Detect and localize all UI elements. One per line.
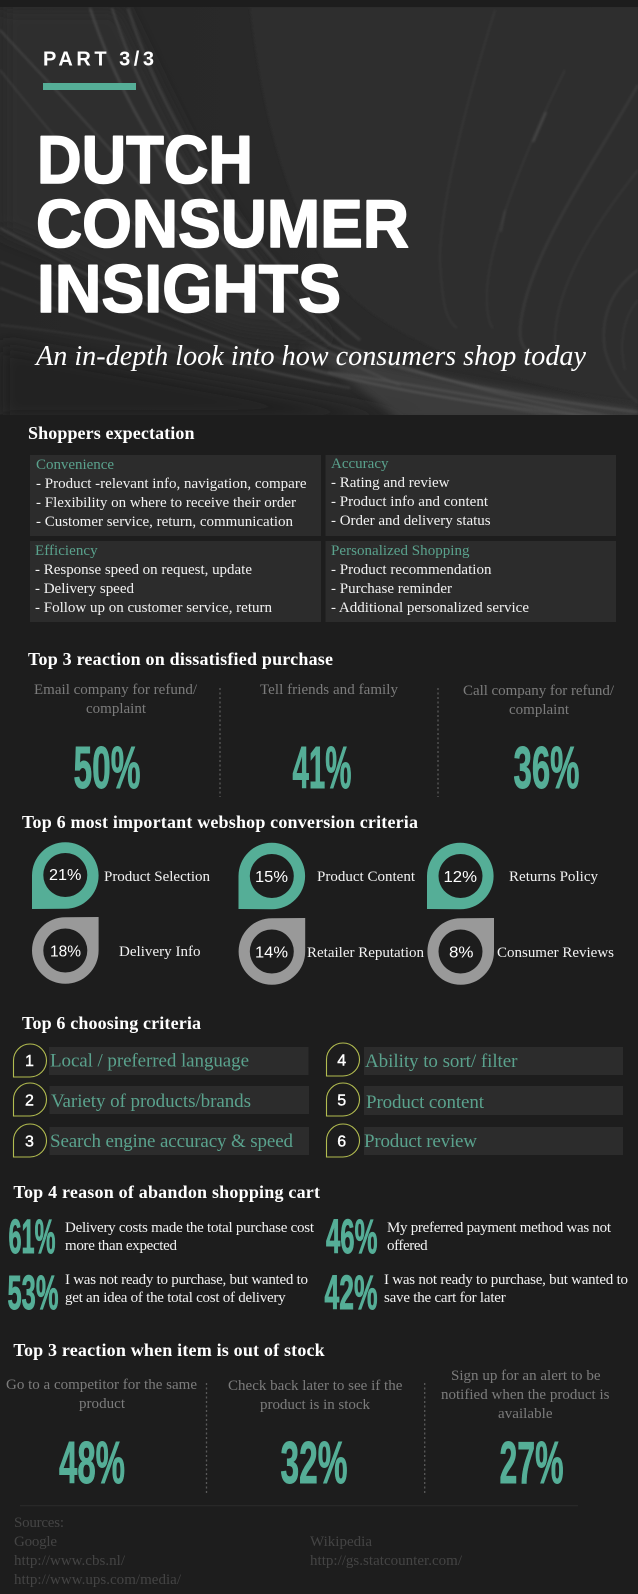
reason 42%: I was not ready to purchase, but wanted to [384,1272,628,1288]
panel: convenience: - Flexibility on where to receive their order [36,495,296,511]
stat: check back 32%: product is in stock [260,1397,370,1413]
stat: call company 36%: Call company for refund/ [463,683,615,699]
choice 5: Product content [366,1092,485,1113]
choice 3 [14,1124,309,1157]
panel: convenience: Convenience [36,457,114,473]
panel: accuracy: - Product info and content [331,494,489,510]
reason 61%: 61% [8,1211,56,1264]
stat: competitor 48% [6,1377,197,1496]
reason 46%: 46% [326,1211,378,1264]
reason 46%: offered [387,1238,428,1254]
choice 2 [14,1083,309,1116]
criterion: product content 15% [238,843,416,909]
choice 1: 1 [25,1053,34,1070]
sources left: Sources: [14,1515,64,1531]
choice 2: 2 [25,1092,34,1110]
panel: efficiency [30,541,321,622]
stat: sign up 27%: Sign up for an alert to be [451,1368,601,1384]
stat: check back 32% [228,1378,403,1496]
reason 42%: 42% [324,1267,378,1320]
sources left: Google [14,1534,57,1550]
stat: email company 50%: Email company for refund/ [34,682,198,698]
header panel: light trail photo [0,7,638,420]
criterion: returns policy 12%: Returns Policy [509,869,598,885]
sources left [14,1515,182,1588]
choice 5: 5 [337,1092,346,1110]
choice 5 [326,1083,623,1116]
choice 1 [14,1044,308,1077]
criterion: product content 15%: Product Content [317,869,416,885]
choice 4: 4 [337,1052,346,1070]
sources left: http://www.ups.com/media/ [14,1572,182,1588]
reason 46% [326,1211,612,1264]
reason 61% [8,1211,315,1264]
criterion: returns policy 12%: 12% [444,869,477,886]
criterion: product selection 21%: 21% [49,867,81,884]
stat: sign up 27%: 27% [500,1430,564,1496]
criterion: returns policy 12% [427,843,598,909]
title: CONSUMER [36,186,409,262]
heading: abandon cart: Top 4 reason of abandon shopping cart [13,1182,320,1202]
choice 3: 3 [25,1134,34,1150]
criterion: retailer reputation 14% [239,918,424,985]
panel: personalized shopping: - Additional personalized service [331,600,529,616]
panel: personalized shopping [326,541,616,622]
stat: sign up 27%: available [498,1406,553,1422]
divider [437,688,439,797]
panel: efficiency: - Delivery speed [35,581,134,597]
criterion: delivery info 18% [32,917,201,984]
stat: call company 36%: complaint [509,702,570,718]
stat: email company 50%: 50% [74,735,140,801]
panel: efficiency: - Response speed on request, update [35,562,252,578]
panel: efficiency: - Follow up on customer service, return [35,600,272,616]
panel: accuracy [326,455,616,536]
reason 53%: get an idea of the total cost of delivery [65,1290,286,1306]
stat: competitor 48%: 48% [59,1430,125,1496]
choice 6: 6 [337,1134,346,1150]
criterion: consumer reviews 8%: Consumer Reviews [497,945,614,961]
heading: out of stock: Top 3 reaction when item is out of stock [13,1340,325,1360]
choice 3: Search engine accuracy & speed [50,1131,294,1152]
criterion: delivery info 18%: Delivery Info [119,944,200,960]
choice 6 [326,1124,623,1157]
choice 1: Local / preferred language [50,1051,249,1072]
stat: tell friends 41%: 41% [292,735,352,801]
criterion: retailer reputation 14%: Retailer Reputation [307,945,424,961]
stat: check back 32%: Check back later to see if the [228,1378,403,1394]
part label: PART 3/3 [43,48,154,70]
divider [424,1383,426,1493]
reason 42% [324,1267,628,1320]
stat: sign up 27%: notified when the product is [441,1387,610,1403]
reason 42%: save the cart for later [384,1290,506,1306]
sources right: Wikipedia [310,1534,372,1550]
criterion: delivery info 18%: 18% [50,944,81,960]
stat: sign up 27% [441,1368,610,1496]
sources right [310,1534,463,1569]
subtitle: An in-depth look into how consumers shop today [34,340,586,372]
panel: convenience [30,455,321,536]
stat: call company 36% [463,683,615,801]
reason 53%: 53% [8,1267,59,1320]
reason 61%: Delivery costs made the total purchase cost [65,1220,315,1236]
criterion: product content 15%: 15% [255,869,288,886]
criterion: product selection 21% [32,842,210,909]
title: INSIGHTS [37,251,341,327]
stat: email company 50%: complaint [86,701,147,717]
panel: convenience: - Product -relevant info, navigation, compare [36,476,307,492]
choice 4: Ability to sort/ filter [365,1051,518,1072]
panel: personalized shopping: Personalized Shopping [331,543,470,559]
choice 2: Variety of products/brands [51,1091,251,1112]
stat: competitor 48%: product [79,1396,126,1412]
sources left: http://www.cbs.nl/ [14,1553,126,1569]
panel: efficiency: Efficiency [35,543,98,559]
stat: tell friends 41% [260,682,398,801]
panel: accuracy: - Rating and review [331,475,450,491]
reason 61%: more than expected [65,1238,178,1254]
panel: accuracy: Accuracy [331,456,389,472]
stat: competitor 48%: Go to a competitor for the same [6,1377,197,1393]
panel: personalized shopping: - Purchase reminder [331,581,452,597]
heading: shoppers expectation: Shoppers expectation [28,423,194,443]
reason 53% [8,1267,308,1320]
heading: conversion criteria: Top 6 most important webshop conversion criteria [22,812,418,832]
criterion: retailer reputation 14%: 14% [255,944,288,962]
reason 53%: I was not ready to purchase, but wanted to [65,1272,308,1288]
choice 6: Product review [364,1131,477,1152]
title [36,122,409,327]
sources right: http://gs.statcounter.com/ [310,1553,463,1569]
criterion: consumer reviews 8%: 8% [449,944,474,962]
reason 46%: My preferred payment method was not [387,1220,612,1236]
title: DUTCH [37,122,253,198]
divider [219,688,221,797]
criterion: consumer reviews 8% [427,918,614,985]
panel: accuracy: - Order and delivery status [331,513,491,529]
heading: dissatisfied purchase: Top 3 reaction on dissatisfied purchase [28,649,333,669]
choice 4 [326,1043,623,1076]
criterion: product selection 21%: Product Selection [104,869,210,885]
stat: call company 36%: 36% [514,735,580,801]
stat: tell friends 41%: Tell friends and family [260,682,398,698]
stat: email company 50% [34,682,198,801]
divider [206,1383,208,1493]
panel: personalized shopping: - Product recommendation [331,562,492,578]
accent bar [43,83,136,90]
stat: check back 32%: 32% [280,1430,348,1496]
panel: convenience: - Customer service, return, communication [36,514,294,530]
heading: choosing criteria: Top 6 choosing criteria [22,1013,201,1033]
